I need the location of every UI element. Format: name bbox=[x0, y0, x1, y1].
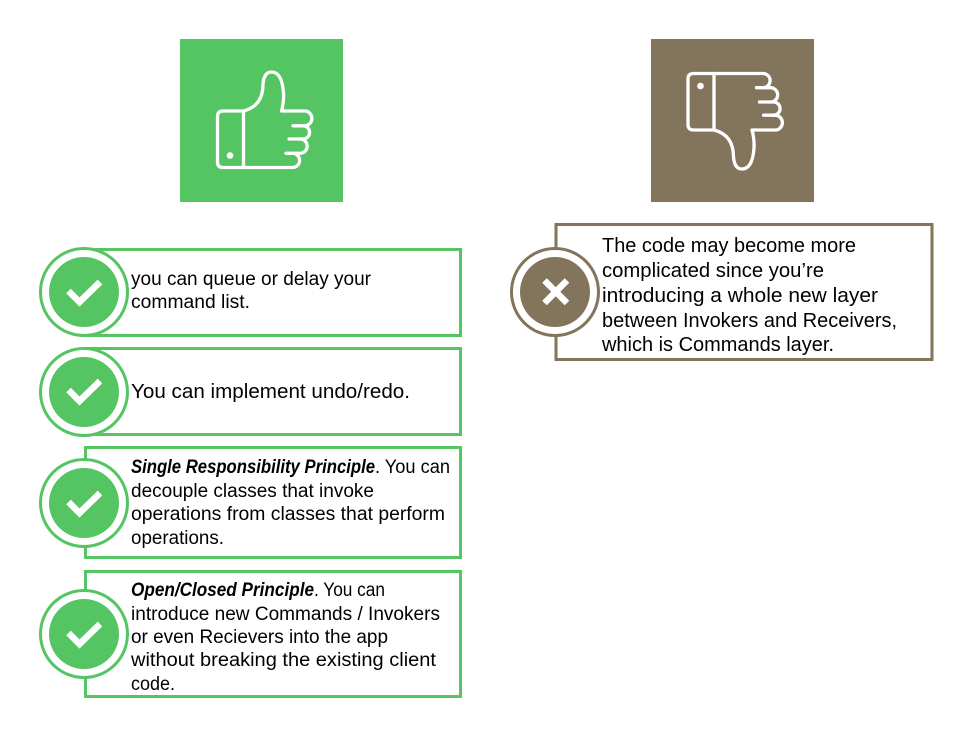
pro item: single responsibility principle: Single Responsibility Principle bbox=[131, 457, 375, 478]
pro item: single responsibility principle: operations from classes that perform bbox=[131, 504, 445, 525]
pro item: queue or delay: you can queue or delay your bbox=[131, 269, 372, 290]
pros icon: thumbs up bbox=[180, 39, 343, 202]
con item: more complicated code: complicated since you’re bbox=[602, 259, 824, 282]
con item: more complicated code: between Invokers and Receivers, bbox=[602, 309, 897, 332]
con item: more complicated code: introducing a whole new layer bbox=[602, 284, 878, 307]
pro item: open/closed principle: Open/Closed Principle bbox=[131, 580, 314, 601]
pro item: open/closed principle: without breaking the existing client bbox=[130, 650, 437, 671]
pro item: open/closed principle: or even Recievers into the app bbox=[131, 627, 388, 648]
pro item: queue or delay bbox=[40, 248, 460, 336]
pro item: open/closed principle bbox=[40, 572, 460, 696]
pro item: open/closed principle: code. bbox=[131, 674, 175, 695]
pro item: single responsibility principle: decouple classes that invoke bbox=[131, 481, 374, 502]
pro item: open/closed principle: . You can bbox=[314, 580, 385, 601]
pro item: single responsibility principle bbox=[40, 448, 460, 558]
con item: more complicated code: The code may become more bbox=[602, 234, 856, 257]
pro item: undo and redo: You can implement undo/redo. bbox=[131, 380, 410, 403]
pro item: single responsibility principle: . You can bbox=[375, 457, 450, 478]
pro item: open/closed principle: introduce new Commands / Invokers bbox=[131, 604, 440, 625]
con item: more complicated code: which is Commands layer. bbox=[601, 333, 834, 356]
pro item: queue or delay: command list. bbox=[131, 292, 250, 313]
cons icon: thumbs down bbox=[651, 39, 814, 202]
con item: more complicated code bbox=[512, 224, 932, 360]
pro item: undo and redo bbox=[40, 348, 460, 436]
pro item: single responsibility principle: operations. bbox=[131, 528, 224, 549]
